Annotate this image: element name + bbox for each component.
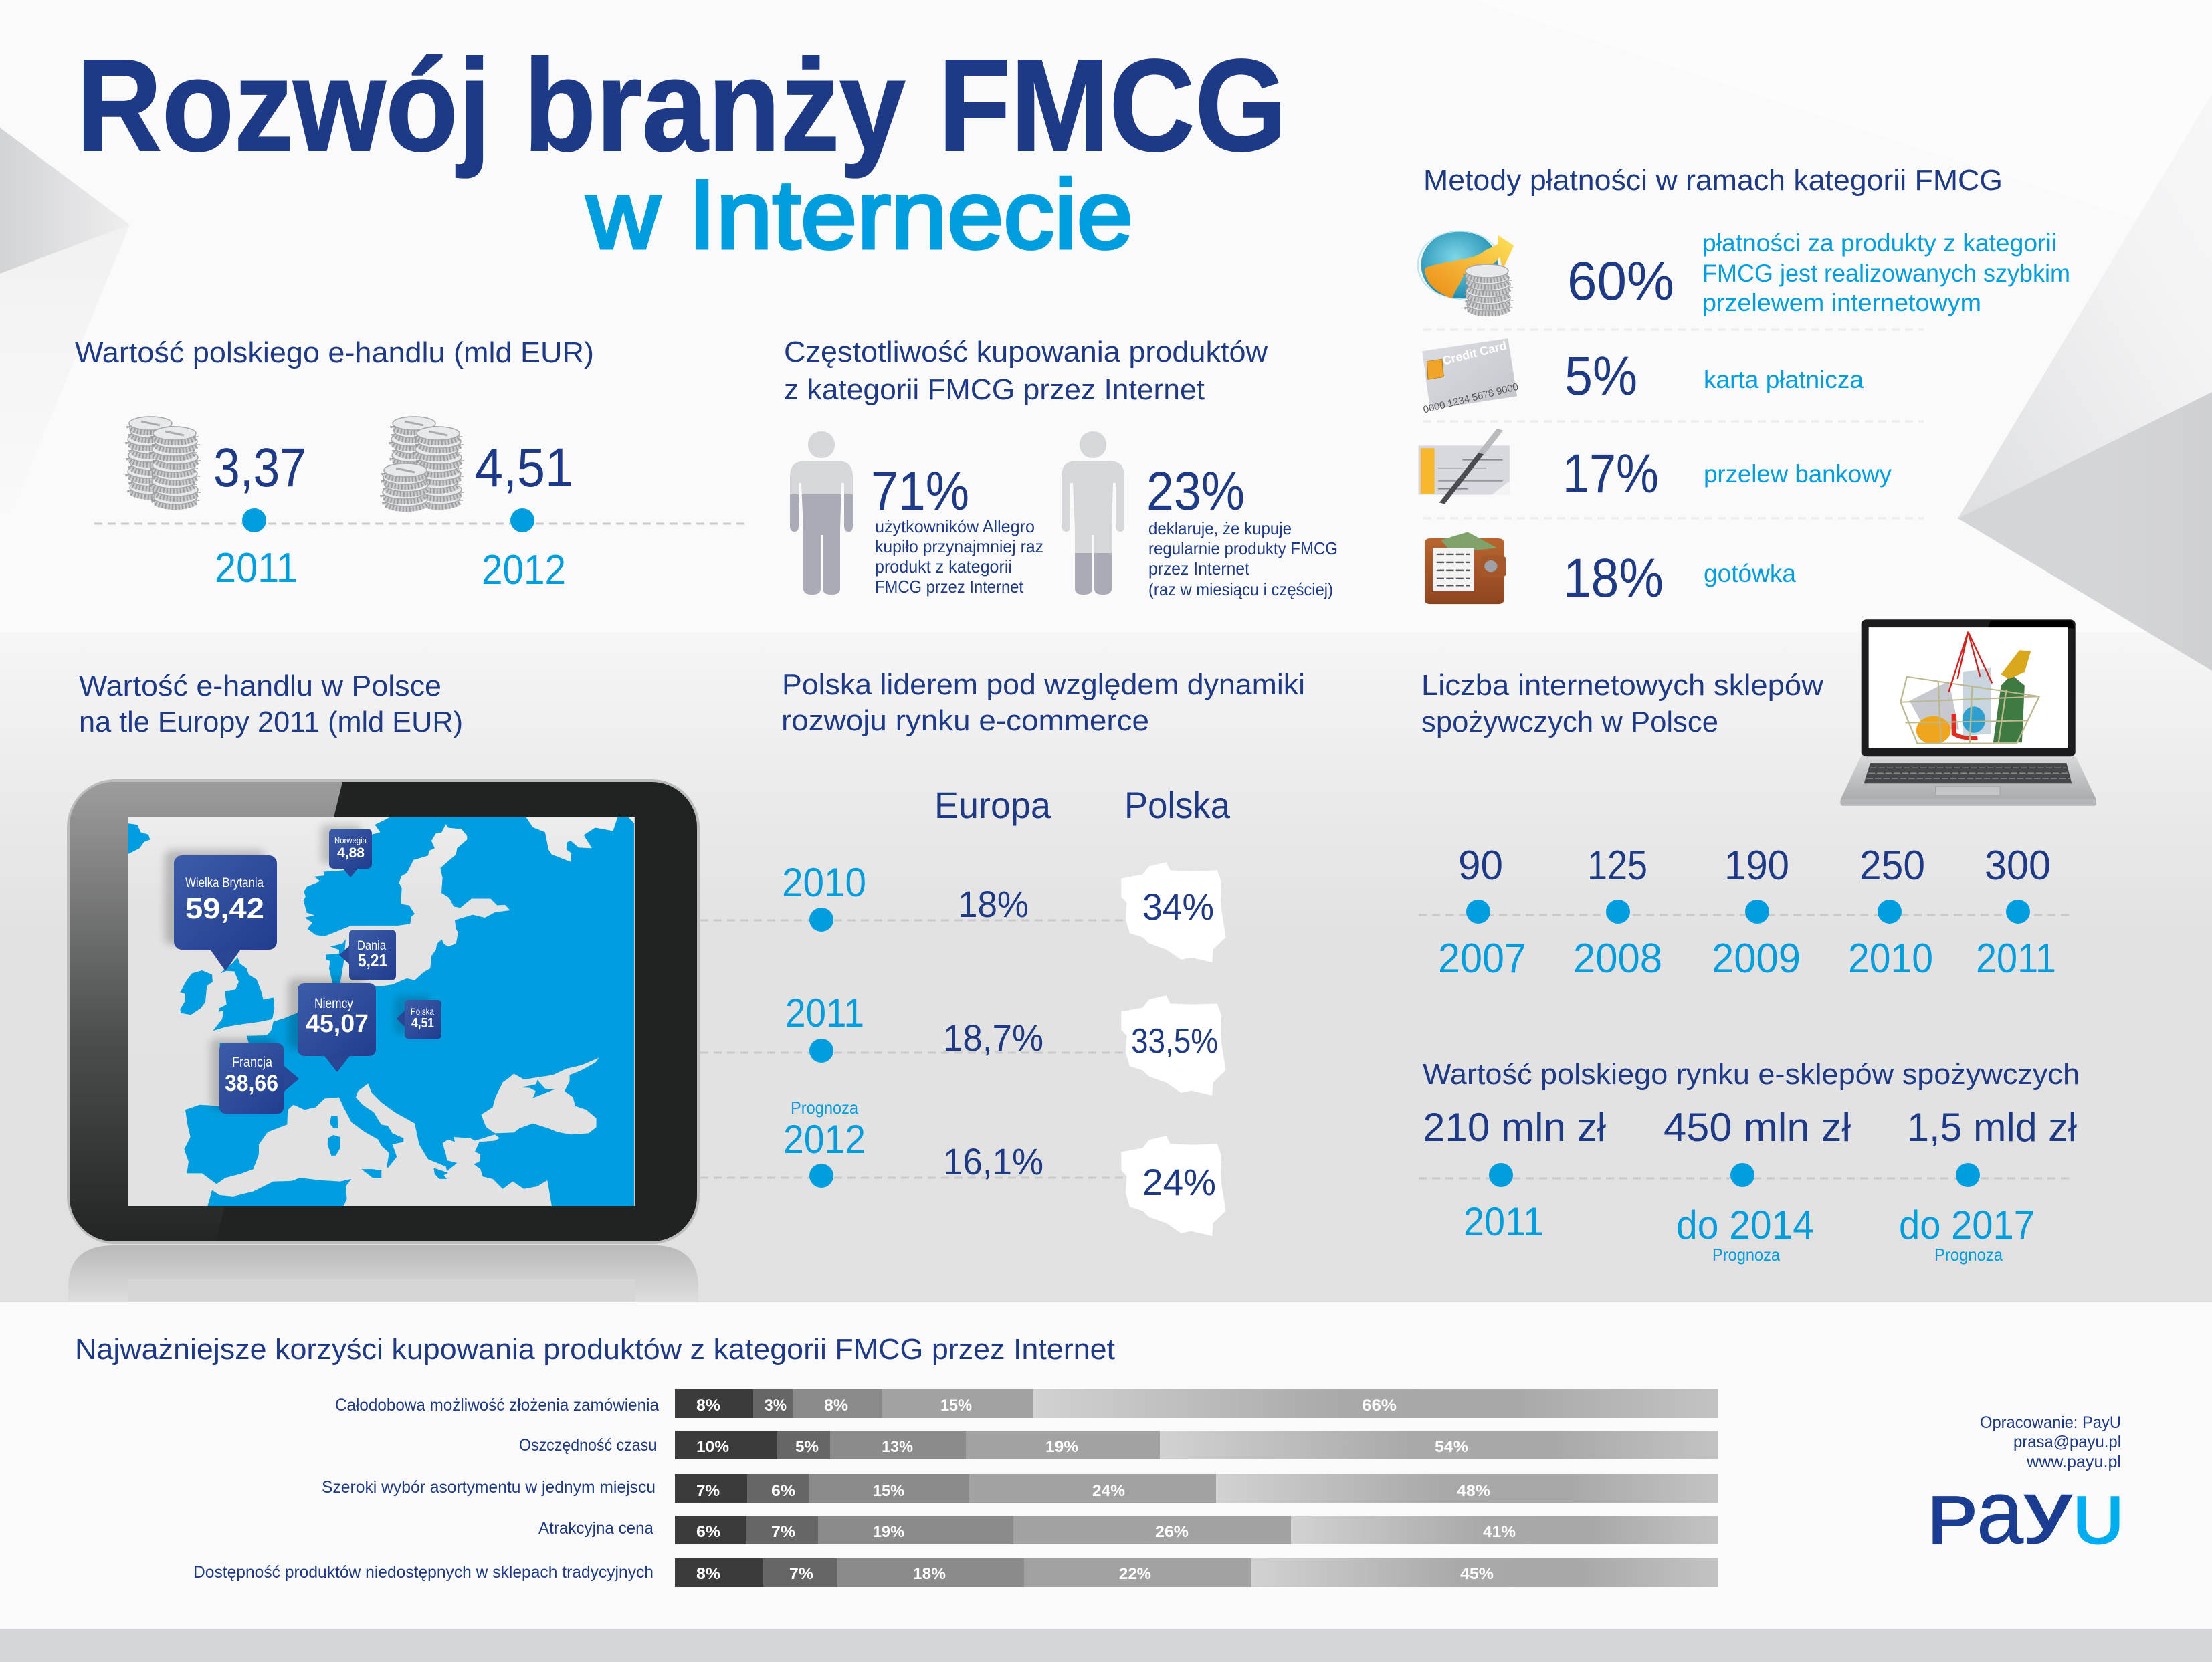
- text block: 23% description: regularnie produkty FMCG: [1148, 538, 1338, 558]
- bar row 4: Atrakcyjna cena: [538, 1519, 653, 1538]
- text block: 60% description: przelewem internetowym: [1702, 289, 1981, 316]
- icon: coins 2011: [128, 417, 198, 510]
- bar row 4: 6%: [696, 1523, 720, 1541]
- bar row 2: 54%: [1435, 1438, 1468, 1456]
- bar row 4: 19%: [873, 1523, 904, 1541]
- panel: benefits stacked bar chart: [75, 1333, 1718, 1587]
- icon: person 23%: [1062, 431, 1124, 595]
- row 2012 forecast: [783, 1098, 1226, 1236]
- periods: 2011: [1464, 1199, 1544, 1244]
- panel: value of Polish e-commerce: 4,51: [475, 437, 573, 498]
- text block: 23% description: [1148, 518, 1338, 599]
- heading: rozwoju rynku e-commerce: [781, 704, 1149, 737]
- panel: payment methods: 18%: [1563, 548, 1664, 609]
- years: 2011: [1976, 936, 2056, 982]
- bar row 2: 5%: [795, 1438, 819, 1456]
- panel: payment methods: gotówka: [1704, 560, 1796, 587]
- icon: wallet: [1425, 532, 1506, 604]
- bar row 2: 10%: [696, 1438, 729, 1456]
- periods: do 2017: [1899, 1203, 2035, 1247]
- bar row 5: [193, 1558, 1718, 1587]
- numbers: 125: [1587, 843, 1647, 889]
- bar row 2: [519, 1431, 1718, 1459]
- bar row 3: 7%: [696, 1482, 720, 1500]
- row 2010: 2010: [782, 860, 866, 905]
- text block: 23% description: przez Internet: [1148, 558, 1250, 579]
- panel: value of Polish e-commerce: 2012: [482, 547, 566, 593]
- bar row 2: Oszczędność czasu: [519, 1436, 657, 1455]
- bar row 4: 41%: [1483, 1523, 1516, 1541]
- bar row 1: 8%: [824, 1396, 848, 1415]
- bar row 1: 66%: [1362, 1396, 1397, 1415]
- panel: buying frequency: z kategorii FMCG przez Internet: [784, 373, 1205, 406]
- panel: Poland growth leader: Europa: [934, 784, 1051, 826]
- panel: payment methods: 17%: [1563, 443, 1659, 504]
- heading: Liczba internetowych sklepów: [1421, 669, 1823, 702]
- years: 2008: [1573, 936, 1662, 982]
- text block: 71% description: produkt z kategorii: [875, 556, 1012, 577]
- callout: Francja: Francja: [232, 1055, 272, 1070]
- panel: value of grocery e-shops market: [1419, 1058, 2080, 1265]
- panel: value of Polish e-commerce: 3,37: [213, 437, 306, 498]
- bar row 5: 45%: [1460, 1565, 1494, 1583]
- values: 1,5 mld zł: [1907, 1105, 2077, 1150]
- callout: Niemcy: [288, 978, 376, 1072]
- bar row 1: 8%: [696, 1396, 720, 1415]
- callout: Wielka Brytania: Wielka Brytania: [185, 876, 264, 890]
- row 2011: 33,5%: [1131, 1022, 1218, 1061]
- panel: payment methods: Metody płatności w ramach kategorii FMCG: [1423, 164, 2003, 197]
- numbers: [1458, 843, 2051, 889]
- icon: credit card: Credit Card: [1441, 339, 1508, 368]
- heading: [781, 668, 1305, 737]
- callout: Dania: [339, 930, 396, 980]
- callout: Polska: [395, 996, 441, 1039]
- years: 2009: [1712, 936, 1801, 982]
- text block: 71% description: FMCG przez Internet: [875, 577, 1024, 597]
- bar row 5: 18%: [913, 1565, 946, 1583]
- bar row 1: 3%: [765, 1396, 787, 1415]
- icon: globe with coins: [1418, 231, 1514, 316]
- title: w Internecie: [586, 160, 1133, 269]
- heading: Polska liderem pod względem dynamiki: [782, 668, 1305, 701]
- bar row 1: 15%: [940, 1396, 972, 1415]
- credits: Opracowanie: PayU: [1980, 1413, 2121, 1432]
- logo: PayU: a: [1977, 1463, 2023, 1562]
- numbers: 190: [1724, 843, 1789, 889]
- heading: [79, 669, 463, 738]
- periods: Prognoza: [1934, 1245, 2003, 1265]
- text block: 60% description: płatności za produkty z kategorii: [1702, 229, 2057, 257]
- bar row 3: 24%: [1092, 1482, 1125, 1500]
- text block: 23% description: deklaruje, że kupuje: [1148, 518, 1292, 538]
- panel: value of Polish e-commerce: [75, 336, 748, 593]
- panel: payment methods: 5%: [1565, 346, 1637, 407]
- bar row 2: 13%: [882, 1438, 913, 1456]
- bar row 4: [538, 1516, 1718, 1544]
- logo: PayU: [1928, 1463, 2124, 1562]
- bar row 4: 26%: [1155, 1523, 1189, 1541]
- panel: value of grocery e-shops market: Wartość polskiego rynku e-sklepów spożywczych: [1423, 1058, 2080, 1091]
- periods: Prognoza: [1712, 1245, 1780, 1265]
- years: 2010: [1848, 936, 1933, 982]
- text block: 23% description: (raz w miesiącu i częściej): [1148, 579, 1333, 599]
- title: Rozwój branży FMCG: [76, 32, 1287, 179]
- panel: number of online grocery shops: [1419, 619, 2096, 982]
- values: 210 mln zł: [1423, 1105, 1606, 1150]
- row 2011: [785, 991, 1226, 1096]
- callout: Polska: 4,51: [411, 1016, 434, 1031]
- row 2011: 2011: [785, 991, 864, 1035]
- heading: na tle Europy 2011 (mld EUR): [79, 706, 463, 738]
- callout: Niemcy: 45,07: [306, 1010, 369, 1038]
- callout: Francja: 38,66: [225, 1071, 278, 1096]
- bar row 5: Dostępność produktów niedostępnych w sklepach tradycyjnych: [193, 1563, 653, 1582]
- panel: European e-commerce map: [67, 669, 698, 1302]
- callout: Norwegia: Norwegia: [334, 835, 367, 845]
- callout: Norwegia: [321, 825, 372, 877]
- callout: Francja: [211, 1039, 299, 1114]
- icon: person 71%: [790, 431, 853, 595]
- panel: Poland growth leader: [700, 668, 1305, 1236]
- tablet reflection: [68, 1245, 698, 1302]
- heading: [1421, 669, 1823, 738]
- values: [1423, 1105, 2077, 1150]
- panel: benefits stacked bar chart: Najważniejsze korzyści kupowania produktów z kategorii FMCG przez Internet: [75, 1333, 1115, 1366]
- panel: payment methods: przelew bankowy: [1704, 460, 1892, 488]
- logo: PayU: P: [1928, 1483, 1977, 1557]
- callout: Norwegia: 4,88: [337, 845, 365, 861]
- bar row 1: [335, 1389, 1718, 1418]
- numbers: 90: [1458, 843, 1503, 889]
- bar row 5: 7%: [789, 1565, 813, 1583]
- years: [1438, 936, 2056, 982]
- icon: bank cheque and pen: [1419, 429, 1510, 503]
- logo: PayU: U: [2073, 1483, 2124, 1557]
- icon: coins 2012: [383, 417, 462, 512]
- callout: Wielka Brytania: 59,42: [185, 892, 264, 925]
- values: 450 mln zł: [1664, 1105, 1851, 1150]
- callout: Polska: Polska: [411, 1006, 434, 1017]
- text block: 60% description: FMCG jest realizowanych szybkim: [1702, 259, 2070, 287]
- credits: prasa@payu.pl: [2013, 1433, 2121, 1451]
- icon: credit card: 0000 1234 5678 9000: [1422, 381, 1520, 416]
- row 2010: 34%: [1142, 886, 1214, 928]
- title: [76, 32, 1287, 269]
- panel: value of Polish e-commerce: 2011: [215, 545, 298, 591]
- callout: Niemcy: Niemcy: [314, 996, 353, 1011]
- callout: Wielka Brytania: [165, 850, 277, 971]
- row 2012 forecast: 24%: [1142, 1161, 1216, 1203]
- heading: spożywczych w Polsce: [1421, 706, 1718, 738]
- tablet: [67, 781, 698, 1243]
- bar row 3: 15%: [873, 1482, 904, 1500]
- text block: 71% description: użytkowników Allegro: [875, 516, 1035, 536]
- periods: [1464, 1199, 2035, 1265]
- years: 2007: [1438, 936, 1526, 982]
- bar row 5: 22%: [1119, 1565, 1151, 1583]
- panel: payment methods: karta płatnicza: [1704, 366, 1864, 393]
- callout: Dania: 5,21: [358, 950, 387, 970]
- bar row 2: 19%: [1045, 1438, 1078, 1456]
- panel: buying frequency: 23%: [1146, 461, 1245, 522]
- bar row 3: 6%: [771, 1482, 795, 1500]
- text block: 71% description: [875, 516, 1043, 597]
- bar row 1: Całodobowa możliwość złożenia zamówienia: [335, 1396, 659, 1415]
- logo: PayU: y: [2025, 1472, 2071, 1544]
- map of Europe: [128, 817, 636, 1206]
- text block: 71% description: kupiło przynajmniej raz: [875, 536, 1043, 556]
- bar row 4: 7%: [771, 1523, 795, 1541]
- periods: do 2014: [1676, 1203, 1814, 1247]
- row 2011: 18,7%: [943, 1017, 1043, 1059]
- credits: [1980, 1413, 2121, 1471]
- row 2010: 18%: [958, 883, 1029, 925]
- callout: Dania: Dania: [357, 939, 386, 953]
- icon: credit card: [1422, 338, 1520, 416]
- credits: www.payu.pl: [2026, 1453, 2121, 1471]
- row 2012 forecast: Prognoza: [791, 1098, 858, 1118]
- bar row 5: 8%: [696, 1565, 720, 1583]
- numbers: 250: [1859, 843, 1925, 889]
- panel: buying frequency: [784, 336, 1338, 599]
- text block: 60% description: [1702, 229, 2070, 316]
- panel: Poland growth leader: Polska: [1124, 784, 1231, 826]
- bar row 3: Szeroki wybór asortymentu w jednym miejscu: [322, 1478, 656, 1497]
- row 2012 forecast: 2012: [783, 1117, 866, 1162]
- row 2012 forecast: 16,1%: [943, 1140, 1043, 1182]
- heading: Wartość e-handlu w Polsce: [79, 669, 441, 702]
- bar row 3: 48%: [1457, 1482, 1490, 1500]
- numbers: 300: [1985, 843, 2051, 889]
- panel: buying frequency: Częstotliwość kupowania produktów: [784, 336, 1268, 369]
- panel: buying frequency: 71%: [871, 461, 969, 522]
- row 2010: [782, 860, 1226, 962]
- panel: payment methods: [1418, 164, 2070, 609]
- icon: laptop with shopping basket: [1840, 619, 2096, 806]
- panel: value of Polish e-commerce: Wartość polskiego e-handlu (mld EUR): [75, 336, 594, 369]
- panel: payment methods: 60%: [1567, 251, 1674, 312]
- bar row 3: [322, 1474, 1718, 1503]
